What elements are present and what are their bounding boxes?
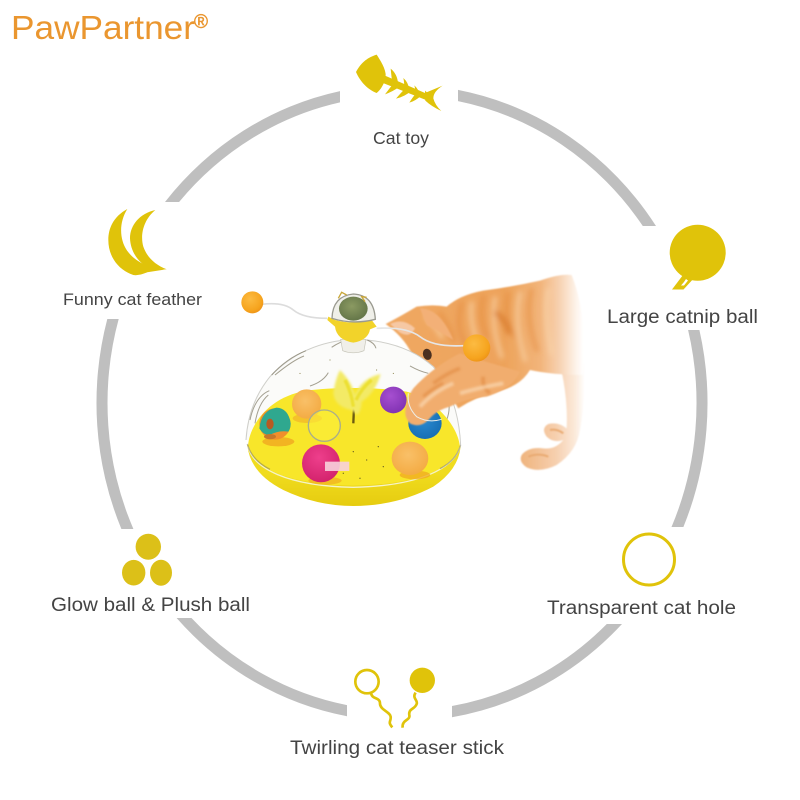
icon: cat feathers: [108, 209, 167, 275]
ring: grey arc segments: [96, 90, 708, 717]
toy: pin-wheel cup: [327, 317, 377, 343]
toy: green bell ball: [259, 408, 294, 446]
label: Cat toy: Cat toy: [373, 128, 429, 148]
toy: purple plush ball: [380, 387, 407, 413]
label: Funny cat feather: Funny cat feather: [63, 290, 202, 309]
toy: yellow floor: [248, 388, 460, 486]
toy: catnip ball in cap: [332, 292, 375, 322]
label: Large catnip ball: Large catnip ball: [607, 307, 758, 328]
cat: hind leg: [521, 363, 584, 470]
logo: PawPartner: PawPartner: [11, 9, 195, 46]
label: Transparent cat hole: Transparent cat hole: [547, 598, 736, 619]
icon: teaser sticks: [355, 668, 435, 728]
logo: PawPartner: ®: [194, 12, 208, 33]
toy: floor specks and rim highlight: [247, 359, 461, 487]
label: Glow ball and Plush ball: Glow ball & Plush ball: [51, 595, 250, 616]
toy: pink plush ball: [302, 444, 349, 485]
toy: transparent dome: [246, 339, 461, 460]
label: Twirling cat teaser stick: Twirling cat teaser stick: [290, 738, 505, 759]
toy: transparent ring: [308, 410, 340, 441]
toy: blue plush ball: [408, 408, 442, 439]
cat: torso and head: [386, 275, 584, 408]
toy: orange glow ball: [392, 442, 430, 479]
icon: fish bone: [356, 55, 443, 111]
toy: right teaser wire and ball: [377, 328, 490, 362]
icon: transparent hole ring: [624, 534, 674, 585]
toy: orange plush ball back-left: [292, 389, 322, 423]
toy: centre stem: [341, 339, 366, 353]
toy: yellow base rim: [247, 445, 461, 506]
central product photo: [241, 275, 584, 506]
toy: left teaser wire and ball: [241, 291, 327, 318]
cat: reaching front leg and paw: [405, 353, 520, 425]
toy: feather stick: [333, 370, 381, 423]
icon: large catnip ball: [670, 225, 726, 290]
icon: three balls: [122, 534, 172, 586]
